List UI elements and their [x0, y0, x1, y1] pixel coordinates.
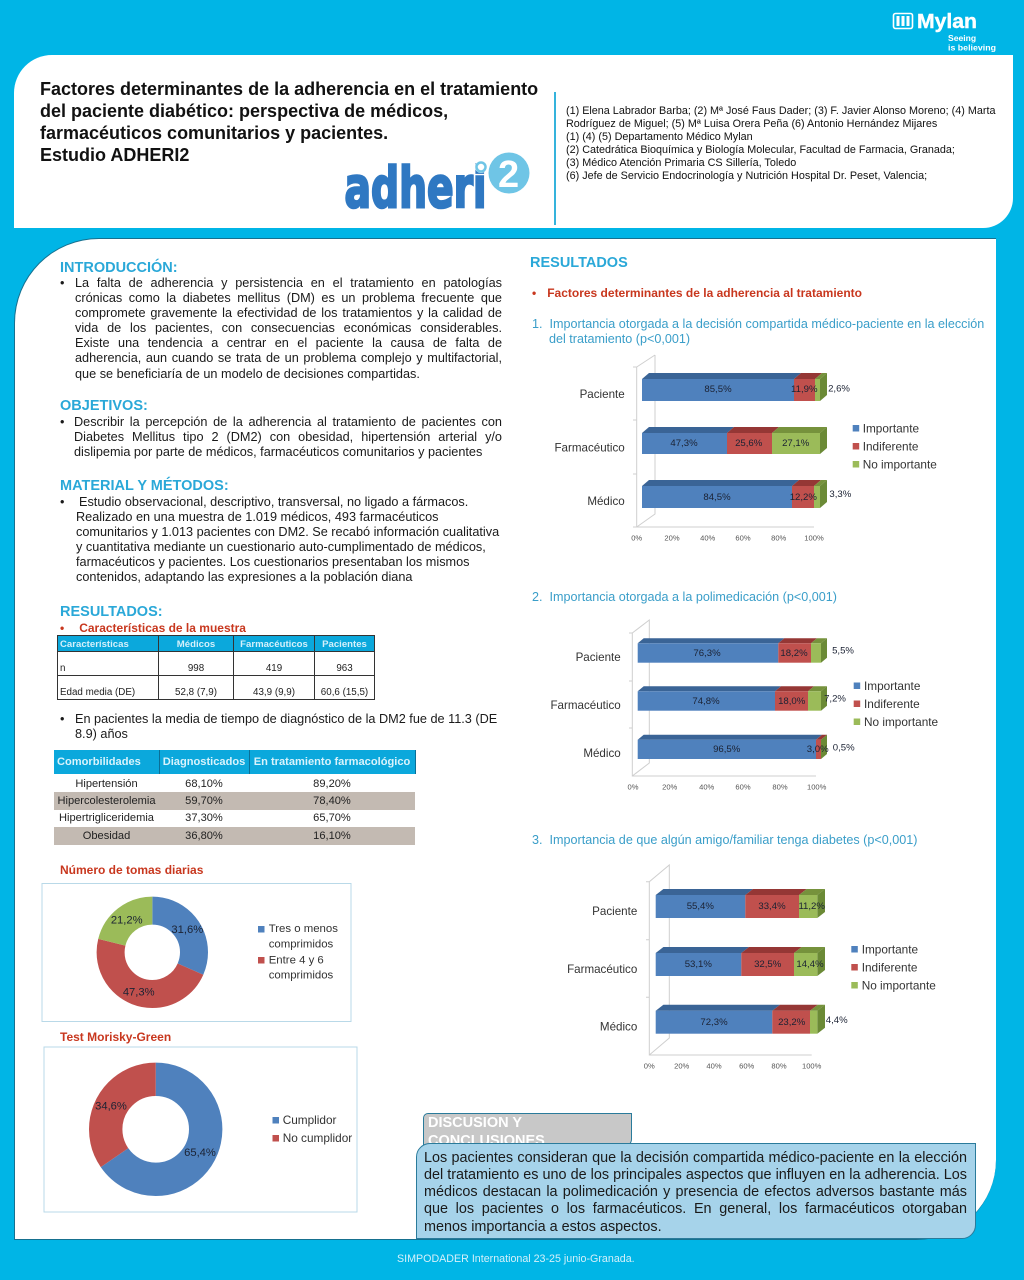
chart: barras pregunta 3: 60%: [739, 1062, 755, 1070]
chart: barras pregunta 1: 47,3%: [670, 438, 698, 449]
table: comorbilidades: 65,70%: [313, 812, 351, 824]
text: introducción: •: [60, 276, 64, 290]
chart: barras pregunta 3: 80%: [771, 1062, 787, 1070]
chart: donut tomas diarias: comprimidos: [269, 938, 334, 950]
bar: Médico: [642, 480, 827, 508]
chart: barras pregunta 3: Farmacéutico: [567, 963, 637, 976]
text: objetivos: Diabetes Mellitus tipo 2 (DM2) con obesidad, hipertensión arterial y/o: [74, 430, 502, 444]
legend: Importante: [862, 942, 919, 956]
chart: barras pregunta 3: 40%: [706, 1062, 722, 1070]
chart: barras pregunta 2: 76,3%: [693, 648, 721, 659]
chart: donut morisky-green: Cumplidor: [283, 1113, 337, 1127]
legend: Indiferente: [863, 440, 919, 454]
chart: barras pregunta 2: 96,5%: [713, 744, 741, 755]
text: introducción: vida de los pacientes, con consecuencias económicas considerables.: [75, 321, 502, 335]
legend: [853, 422, 937, 472]
authors: (1) (4) (5) Departamento Médico Mylan: [566, 130, 753, 142]
title: del paciente diabético: perspectiva de médicos,: [40, 101, 448, 121]
chart: barras pregunta 3: 32,5%: [754, 959, 782, 970]
chart: barras pregunta 1: 27,1%: [782, 438, 810, 449]
table: características: 60,6 (15,5): [321, 687, 368, 698]
table: comorbilidades: 16,10%: [313, 830, 351, 842]
chart: barras pregunta 2: 60%: [735, 782, 751, 792]
callout: discusión y conclusiones: [416, 1143, 976, 1239]
text: material y métodos: •: [60, 494, 64, 508]
legend: Indiferente: [862, 960, 918, 974]
chart: barras pregunta 3: 53,1%: [685, 959, 712, 970]
chart: barras pregunta 3: 4,4%: [826, 1015, 848, 1026]
text: pregunta 1: [532, 316, 984, 346]
chart: barras pregunta 1: 25,6%: [735, 438, 763, 449]
table: comorbilidades: 36,80%: [185, 830, 223, 842]
chart: barras pregunta 2: 3,0%: [807, 744, 829, 755]
heading: resultados izquierda: RESULTADOS:: [60, 604, 163, 620]
table: características: n: [60, 663, 65, 674]
title: Factores determinantes de la adherencia en el tratamiento: [40, 79, 538, 99]
divider: [554, 92, 556, 225]
chart: barras pregunta 1: 84,5%: [703, 492, 731, 503]
chart: barras pregunta 3: 20%: [674, 1062, 690, 1070]
chart: barras pregunta 2: 80%: [772, 782, 788, 792]
table: comorbilidades: 89,20%: [313, 778, 351, 790]
title: farmacéuticos comunitarios y pacientes.: [40, 123, 388, 143]
callout: discusión y conclusiones: menos importancia a estos aspectos.: [424, 1219, 662, 1235]
tab: discusión y conclusiones: [423, 1113, 632, 1147]
table: características: 43,9 (9,9): [253, 687, 295, 698]
callout: discusión y conclusiones: del tratamiento es uno de los principales aspectos que influyen en la adherencia. Los: [424, 1167, 967, 1183]
authors: (3) Médico Atención Primaria CS Sillería, Toledo: [566, 156, 796, 168]
authors: (2) Catedrática Bioquímica y Biología Molecular, Facultad de Farmacia, Granada;: [566, 144, 955, 156]
subheading: características de la muestra: • Características de la muestra: [60, 621, 246, 635]
table: comorbilidades: 59,70%: [185, 794, 223, 806]
chart: barras pregunta 1: 80%: [771, 534, 787, 542]
bar: Paciente: [638, 638, 827, 663]
legend: No importante: [864, 715, 939, 729]
heading: resultados derecha: RESULTADOS: [530, 254, 628, 270]
chart: donut tomas diarias: Tres o menos: [269, 923, 338, 935]
text: objetivos: Describir la percepción de la adherencia al tratamiento de pacientes con: [74, 414, 502, 428]
table: comorbilidades: 78,40%: [313, 794, 351, 806]
callout: discusión y conclusiones: que los pacientes o los farmacéuticos. En general, los farmacéuticos otorgaban: [424, 1201, 967, 1217]
legend: Importante: [864, 679, 921, 693]
chart: barras pregunta 2: 18,0%: [778, 696, 806, 707]
table: características: Edad media (DE): [60, 687, 135, 698]
chart: barras pregunta 3: 14,4%: [796, 959, 824, 970]
table: comorbilidades: Hipercolesterolemia: [57, 794, 156, 806]
chart: barras pregunta 2: 0,5%: [833, 742, 855, 754]
legend: [851, 942, 936, 992]
chart: barras pregunta 1: 100%: [804, 534, 824, 542]
text: pregunta 3: 3. Importancia de que algún amigo/familiar tenga diabetes (p<0,001): [532, 832, 917, 846]
legend: Indiferente: [864, 697, 920, 711]
chart: barras pregunta 1: 20%: [664, 534, 680, 542]
authors: (6) Jefe de Servicio Endocrinología y Nutrición Hospital Dr. Peset, Valencia;: [566, 170, 927, 182]
text: tiempo de diagnóstico: •: [60, 712, 64, 726]
text: introducción: crónicas como la diabetes mellitus (DM) es un problema frecuente que: [75, 291, 502, 305]
chart: donut morisky-green: [44, 1046, 358, 1212]
bar: Farmacéutico: [638, 686, 827, 711]
chart: barras pregunta 2: 40%: [699, 782, 715, 792]
logo: Mylan: Seeing: [948, 33, 976, 43]
subheading: factores determinantes: • Factores determinantes de la adherencia al tratamiento: [532, 286, 862, 300]
axes: [646, 865, 812, 1055]
text: pregunta 1: del tratamiento (p<0,001): [549, 332, 690, 346]
panel: main content: [14, 238, 996, 1240]
chart: donut morisky-green: 65,4%: [184, 1147, 216, 1159]
axes: [633, 355, 814, 527]
chart: barras pregunta 2: 7,2%: [824, 694, 846, 704]
chart: donut tomas diarias: [42, 883, 352, 1022]
table: comorbilidades: Comorbilidades: [57, 756, 141, 768]
table: comorbilidades: 37,30%: [185, 812, 223, 824]
table: características: Farmacéuticos: [240, 639, 308, 650]
bar: Farmacéutico: [656, 947, 825, 976]
chart: barras pregunta 1: 11,9%: [791, 384, 818, 395]
table: comorbilidades: [54, 750, 416, 845]
bar: Paciente: [656, 889, 825, 918]
chart: barras pregunta 2: 20%: [662, 782, 678, 792]
table: características: Médicos: [177, 639, 215, 650]
legend: [854, 679, 939, 729]
tab: discusión y conclusiones: DISCUSION Y: [428, 1115, 522, 1131]
chart: barras pregunta 2: [550, 619, 939, 792]
logo: adheri2: adheri: [344, 156, 486, 221]
text: objetivos: dislipemia por parte de médicos, farmacéuticos comunitarios y pacientes: [74, 445, 482, 459]
chart: barras pregunta 1: 3,3%: [829, 489, 852, 500]
chart: barras pregunta 3: Paciente: [592, 905, 637, 918]
table: características: 419: [266, 663, 282, 674]
footer: SIMPODADER International 23-25 junio-Granada.: [397, 1253, 635, 1265]
authors: [566, 104, 996, 182]
legend: No importante: [863, 458, 937, 472]
chart: barras pregunta 1: 12,2%: [790, 492, 817, 503]
text: introducción: adherencia, aun cuando se trata de un problema complejo y multifactorial,: [75, 351, 502, 365]
panel: header: [14, 55, 1013, 228]
authors: (1) Elena Labrador Barba; (2) Mª José Faus Dader; (3) F. Javier Alonso Moreno; (4) Marta: [566, 104, 995, 116]
chart: barras pregunta 3: 72,3%: [700, 1017, 728, 1028]
table: comorbilidades: Obesidad: [83, 830, 130, 842]
chart: barras pregunta 1: 60%: [735, 534, 751, 542]
text: tiempo de diagnóstico: [60, 712, 497, 741]
callout: discusión y conclusiones: médicos destacan la polimedicación y presencia de efectos adversos bastante más: [424, 1184, 967, 1200]
text: material y métodos: [60, 494, 500, 584]
table: características: [57, 635, 375, 700]
chart: barras pregunta 3: 11,2%: [798, 901, 825, 912]
table: comorbilidades: Diagnosticados: [163, 756, 245, 768]
chart: barras pregunta 2: 5,5%: [832, 646, 854, 656]
heading: objetivos: OBJETIVOS:: [60, 398, 148, 414]
chart: donut tomas diarias: Entre 4 y 6: [269, 954, 324, 966]
text: material y métodos: y cuantitativa mediante un cuestionario auto-cumplimentado de médicos,: [76, 540, 486, 554]
chart: barras pregunta 1: Farmacéutico: [554, 442, 625, 454]
chart: barras pregunta 3: [567, 864, 936, 1070]
chart: barras pregunta 1: 40%: [700, 534, 716, 542]
text: introducción: [60, 276, 502, 381]
authors: Rodríguez de Miguel; (5) Mª Luisa Orera Peña (6) Antonio Hernández Mijares: [566, 118, 937, 130]
table: características: 998: [188, 663, 204, 674]
logo: Mylan: [892, 11, 996, 52]
heading: introducción: INTRODUCCIÓN:: [60, 260, 178, 276]
text: pregunta 2: 2. Importancia otorgada a la polimedicación (p<0,001): [532, 590, 837, 604]
chart: barras pregunta 3: 100%: [802, 1062, 822, 1070]
chart: barras pregunta 3: 55,4%: [687, 901, 714, 912]
chart: barras pregunta 1: 2,6%: [828, 384, 850, 394]
text: introducción: compromete gravemente la efectividad de los tratamientos y la calidad de: [75, 306, 502, 320]
text: material y métodos: contenidos, adaptando las expresiones a la población diana: [76, 570, 412, 584]
chart: barras pregunta 1: 85,5%: [704, 384, 732, 395]
chart: barras pregunta 3: 23,2%: [778, 1017, 806, 1028]
chart: barras pregunta 2: 74,8%: [692, 696, 720, 707]
chart: barras pregunta 2: Farmacéutico: [550, 699, 621, 712]
table: características: 963: [336, 663, 353, 674]
bar: Médico: [638, 735, 827, 759]
table: características: Pacientes: [322, 639, 367, 650]
chart: barras pregunta 3: Médico: [600, 1020, 637, 1034]
chart: barras pregunta 1: Paciente: [580, 388, 625, 401]
table: comorbilidades: Hipertrigliceridemia: [59, 812, 154, 824]
heading: número de tomas diarias: Número de tomas diarias: [60, 863, 203, 877]
text: pregunta 1: 1. Importancia otorgada a la decisión compartida médico-paciente en la elección: [532, 316, 984, 330]
logo: Mylan: Mylan: [917, 11, 977, 33]
heading: test morisky-green: Test Morisky-Green: [60, 1030, 171, 1044]
table: comorbilidades: Hipertensión: [75, 778, 138, 790]
text: objetivos: [60, 414, 502, 459]
text: material y métodos: Estudio observacional, descriptivo, transversal, no ligado a fármacos.: [79, 494, 468, 508]
chart: barras pregunta 1: 0%: [631, 534, 642, 542]
table: comorbilidades: En tratamiento farmacológico: [254, 756, 410, 768]
table: características: Características: [60, 639, 129, 650]
text: objetivos: •: [60, 414, 64, 428]
axes: [629, 620, 816, 776]
chart: barras pregunta 1: Médico: [587, 495, 625, 508]
chart: barras pregunta 2: 0%: [628, 782, 639, 792]
logo: adheri2: 2: [498, 154, 519, 196]
text: material y métodos: Realizado en una muestra de 1.019 médicos, 493 farmacéuticos: [76, 510, 439, 524]
table: características: 52,8 (7,9): [175, 687, 217, 698]
text: introducción: Existe una tendencia a centrar en el paciente la causa de falta de: [75, 336, 502, 350]
bar: Paciente: [642, 373, 827, 401]
chart: barras pregunta 3: 33,4%: [758, 901, 786, 912]
text: material y métodos: comunitarios y 1.013 pacientes con DM2. Se recabó información cualitativa: [76, 525, 499, 539]
logo: Mylan: is believing: [948, 42, 996, 52]
bar: Médico: [656, 1005, 825, 1034]
chart: barras pregunta 2: Médico: [583, 747, 621, 760]
chart: donut tomas diarias: 47,3%: [123, 986, 155, 998]
chart: donut morisky-green: No cumplidor: [283, 1131, 352, 1145]
heading: material y métodos: MATERIAL Y MÉTODOS:: [60, 478, 229, 494]
title: [40, 79, 538, 165]
text: tiempo de diagnóstico: 8.9) años: [75, 727, 128, 741]
legend: Importante: [863, 422, 920, 436]
title: Estudio ADHERI2: [40, 145, 189, 165]
chart: barras pregunta 2: Paciente: [576, 651, 621, 664]
chart: donut tomas diarias: 21,2%: [111, 915, 143, 927]
text: introducción: que se beneficiaría de un modelo de decisiones compartidas.: [75, 367, 420, 381]
text: tiempo de diagnóstico: En pacientes la media de tiempo de diagnóstico de la DM2 fue de 11.3 (DE: [75, 712, 497, 726]
chart: donut morisky-green: 34,6%: [95, 1101, 127, 1113]
legend: No importante: [862, 978, 936, 992]
chart: barras pregunta 2: 100%: [807, 782, 827, 792]
bar: Farmacéutico: [642, 427, 827, 454]
chart: donut tomas diarias: comprimidos: [269, 970, 334, 982]
table: comorbilidades: 68,10%: [185, 778, 223, 790]
text: introducción: La falta de adherencia y persistencia en el tratamiento en patologías: [75, 276, 502, 290]
chart: donut tomas diarias: 31,6%: [171, 924, 203, 936]
chart: barras pregunta 3: 0%: [644, 1062, 655, 1070]
callout: discusión y conclusiones: Los pacientes consideran que la decisión compartida médico-paciente en la elección: [424, 1150, 967, 1166]
text: material y métodos: farmacéuticos y pacientes. Los cuestionarios presentaban los mismos: [76, 555, 470, 569]
chart: barras pregunta 2: 18,2%: [780, 648, 808, 659]
chart: barras pregunta 1: [554, 354, 937, 542]
